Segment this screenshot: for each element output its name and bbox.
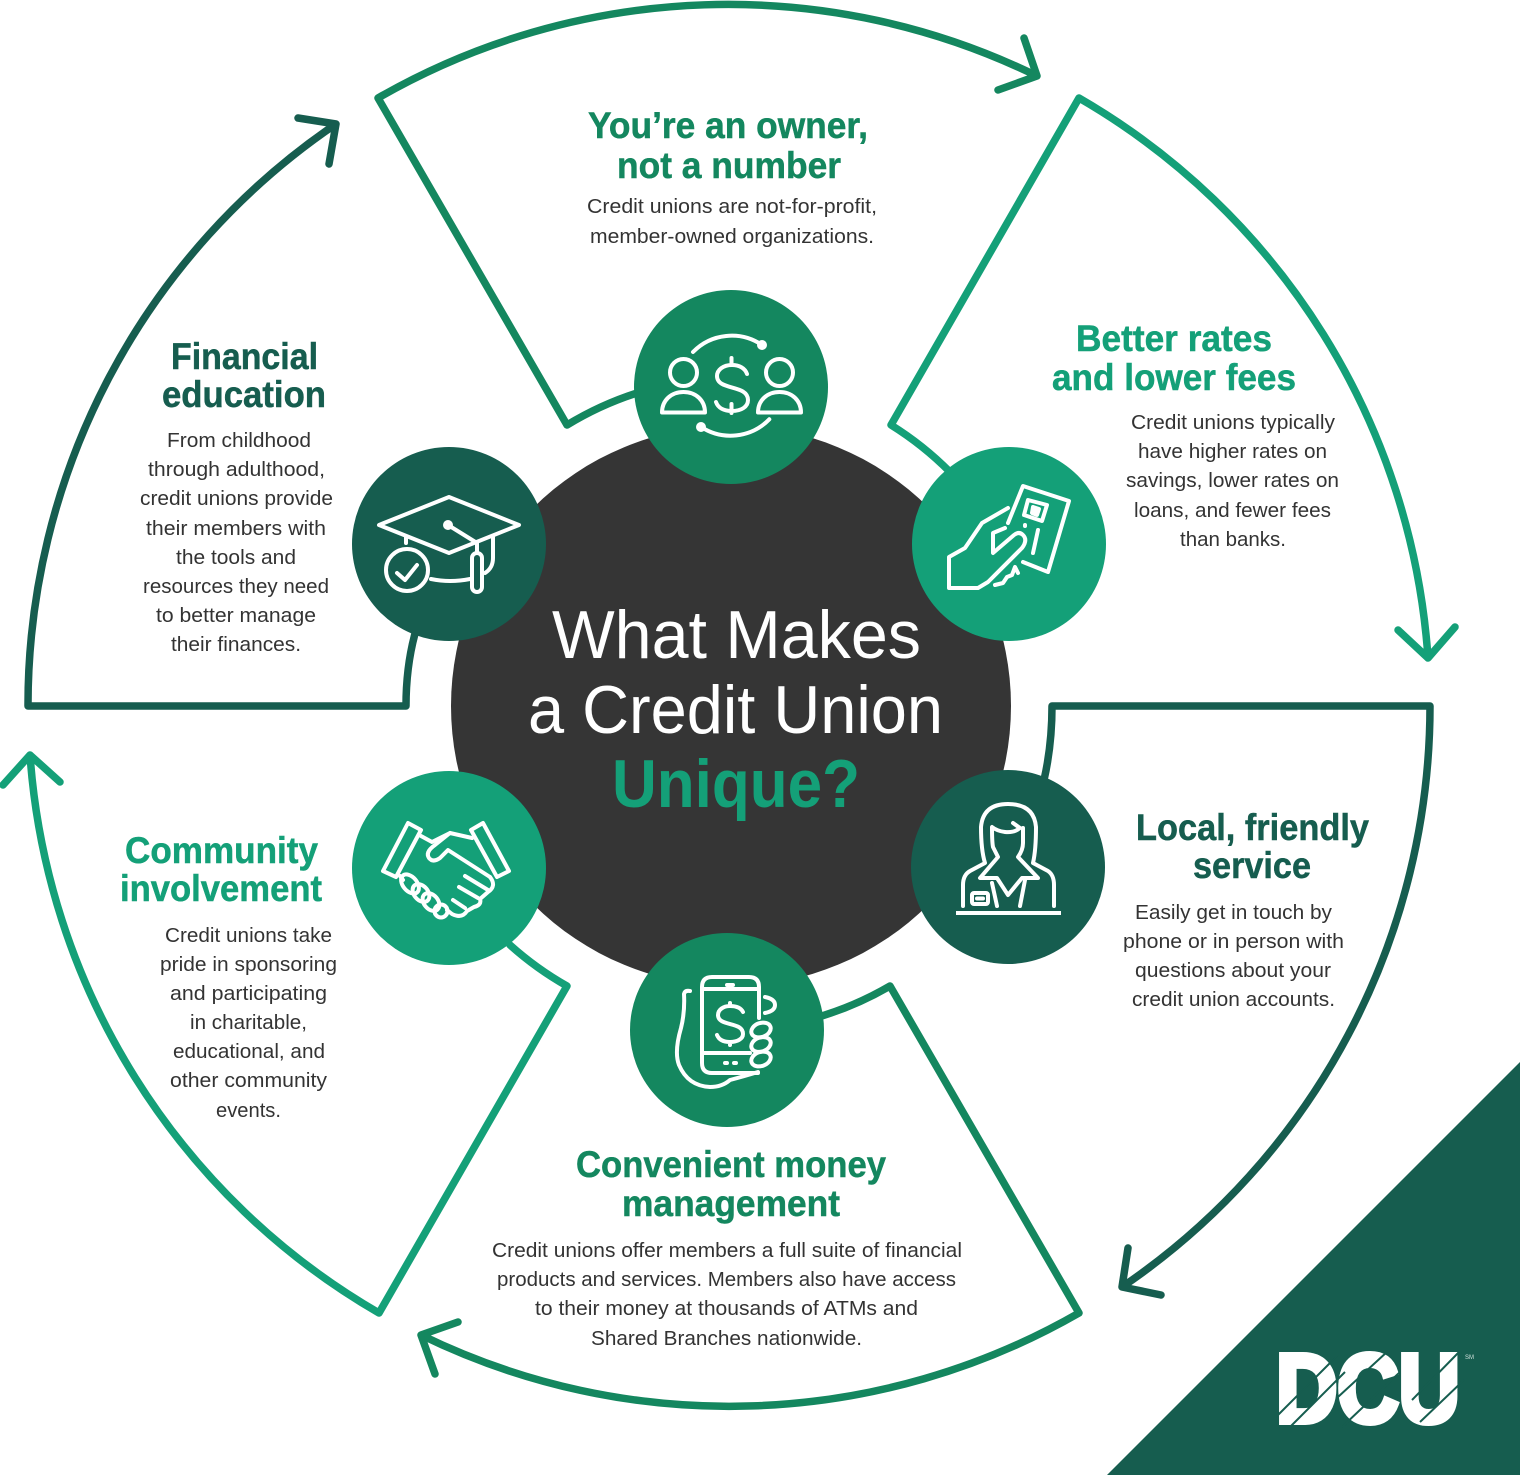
text: money: Shared Branches nationwide. <box>591 1327 862 1350</box>
text: community: in charitable, <box>190 1011 307 1034</box>
panel: you're an owner <box>378 4 1037 484</box>
text: rates: have higher rates on <box>1138 440 1327 463</box>
heading: community: Community <box>125 830 318 871</box>
heading: education <box>162 336 326 415</box>
arrow: money <box>421 986 1079 1406</box>
text: money: Credit unions offer members a full suite of financial <box>492 1239 962 1262</box>
text: community: and participating <box>170 982 327 1005</box>
center circle <box>451 426 1011 986</box>
arrow: community <box>3 755 567 1313</box>
text: owner: member-owned organizations. <box>590 225 874 248</box>
text: money: products and services. Members also have access <box>497 1268 956 1291</box>
center title: a Credit Union <box>528 672 943 748</box>
heading: service: service <box>1193 845 1311 886</box>
heading: community <box>120 830 322 909</box>
text: education: the tools and <box>176 546 296 569</box>
panel: local service <box>911 706 1430 1295</box>
heading: money <box>576 1144 886 1224</box>
text: rates: Credit unions typically <box>1131 411 1336 434</box>
icon: handshake <box>352 771 546 965</box>
panel: community involvement <box>3 755 567 1313</box>
text: service: Easily get in touch by <box>1135 901 1333 924</box>
panel: financial education <box>28 118 546 706</box>
logo: DCU: SM <box>1465 1355 1474 1361</box>
text: service: phone or in person with <box>1123 930 1344 953</box>
text: community: other community <box>170 1069 328 1092</box>
text: education: resources they need <box>143 575 329 598</box>
text: owner <box>587 195 877 248</box>
heading: education: education <box>162 374 326 415</box>
text: education: to better manage <box>156 604 316 627</box>
heading: rates <box>1052 318 1296 398</box>
text: rates <box>1126 411 1339 551</box>
text: rates: loans, and fewer fees <box>1134 499 1331 522</box>
text: service <box>1123 901 1344 1011</box>
heading: rates: Better rates <box>1076 318 1272 359</box>
icon: phone in hand <box>630 933 824 1127</box>
text: service: credit union accounts. <box>1132 988 1335 1011</box>
text: community: educational, and <box>173 1040 325 1063</box>
text: money: to their money at thousands of ATMs and <box>535 1297 918 1320</box>
heading: community: involvement <box>120 868 322 909</box>
arrow: owner <box>378 4 1037 425</box>
text: community <box>160 924 337 1122</box>
text: owner: Credit unions are not-for-profit, <box>587 195 877 218</box>
icon: hand with card <box>912 447 1106 641</box>
heading: money: management <box>622 1183 840 1224</box>
heading: education: Financial <box>171 336 318 377</box>
text: community: Credit unions take <box>165 924 332 947</box>
arrow: rates <box>891 98 1455 658</box>
text: money <box>492 1239 962 1350</box>
text: education: their finances. <box>171 633 301 656</box>
center title: What Makes <box>552 597 921 673</box>
icon: graduation cap <box>352 447 546 641</box>
logo: DCU: DCU <box>1276 1334 1460 1443</box>
panel: better rates <box>891 98 1455 658</box>
heading: owner: not a number <box>617 145 841 186</box>
center title: Unique? <box>612 746 860 822</box>
corner triangle <box>1107 1062 1520 1475</box>
text: community: events. <box>216 1099 281 1122</box>
text: community: pride in sponsoring <box>160 953 337 976</box>
arrow: service <box>1044 706 1430 1295</box>
panel: convenient money management <box>421 933 1079 1406</box>
text: education: From childhood <box>167 429 311 452</box>
heading: owner: You’re an owner, <box>588 105 868 146</box>
center title <box>528 597 943 822</box>
text: rates: savings, lower rates on <box>1126 469 1339 492</box>
heading: money: Convenient money <box>576 1144 886 1185</box>
text: education: their members with <box>146 517 326 540</box>
heading: owner <box>588 105 868 186</box>
text: rates: than banks. <box>1180 528 1286 551</box>
icon: people and dollar <box>634 290 828 484</box>
text: education: through adulthood, <box>148 458 325 481</box>
heading: service <box>1136 807 1369 886</box>
heading: rates: and lower fees <box>1052 357 1296 398</box>
arrow: education <box>28 118 416 706</box>
icon: representative <box>911 770 1105 964</box>
text: education <box>140 429 333 656</box>
heading: service: Local, friendly <box>1136 807 1369 848</box>
text: education: credit unions provide <box>140 487 333 510</box>
text: service: questions about your <box>1135 959 1331 982</box>
